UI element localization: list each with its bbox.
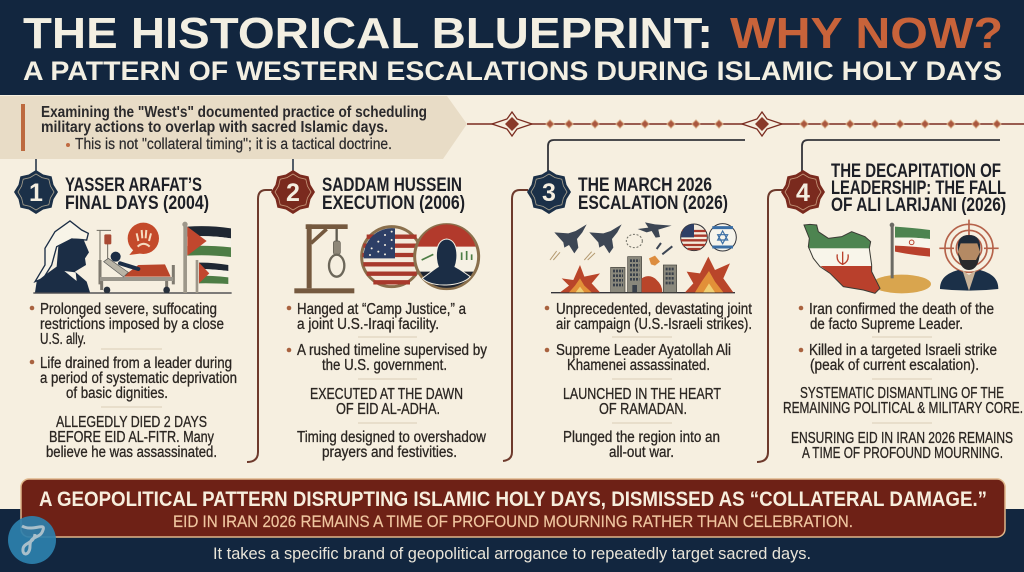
panel: intro arrow banner: This is not "collateral timing"; it is a tactical doctrine. (75, 136, 392, 153)
badge 4: 4 (796, 179, 810, 207)
text block 2: a joint U.S.-Iraqi facility. (297, 316, 439, 333)
icon: leader, hospital bed and flags (33, 221, 232, 293)
panel: column 4 Larijani (781, 160, 1023, 462)
text block 2: A rushed timeline supervised by (297, 342, 487, 359)
heading 3: ESCALATION (2026) (578, 192, 728, 214)
text block 3: Khamenei assassinated. (567, 357, 710, 374)
text block 2 (287, 301, 487, 461)
icon: watermark logo (8, 516, 56, 564)
text block 2: the U.S. government. (322, 357, 447, 374)
callout: conclusion banner (21, 479, 1005, 537)
icon: jets, city and explosions (550, 222, 736, 293)
text block 4 (783, 301, 1023, 462)
text block 1: ALLEGEDLY DIED 2 DAYS (56, 414, 207, 431)
text block 3: Supreme Leader Ayatollah Ali (556, 342, 731, 359)
heading 1: YASSER ARAFAT’S (65, 174, 202, 196)
text block 1 (30, 301, 237, 461)
panel: intro arrow banner (0, 96, 467, 159)
heading 2: EXECUTION (2006) (322, 192, 465, 214)
text block 1: Life drained from a leader during (40, 355, 232, 372)
text block 2: EXECUTED AT THE DAWN (310, 386, 463, 403)
text block 2: OF EID AL-ADHA. (336, 401, 440, 418)
text block 4: (peak of current escalation). (810, 357, 979, 374)
badge 3 (527, 170, 571, 214)
panel: column 3 March 2026 (527, 170, 753, 461)
subtitle: A PATTERN OF WESTERN ESCALATIONS DURING ISLAMIC HOLY DAYS (23, 56, 1002, 86)
heading 1: FINAL DAYS (2004) (65, 192, 209, 214)
icon: gallows and flag medallions (294, 224, 479, 293)
title accent: WHY NOW? (730, 9, 1003, 58)
closing line: It takes a specific brand of geopolitical arrogance to repeatedly target sacred days. (213, 544, 811, 563)
text block 3: all-out war. (609, 444, 674, 461)
heading 1 (65, 174, 209, 214)
text block 2: Timing designed to overshadow (297, 429, 487, 446)
text block 1: of basic dignities. (66, 385, 168, 402)
badge 3: 3 (542, 179, 556, 207)
badge 2: 2 (286, 179, 300, 207)
header: title band (0, 0, 1024, 95)
heading 4 (831, 160, 1006, 216)
text block 2: prayers and festivities. (322, 444, 457, 461)
text block 3 (545, 301, 753, 461)
badge 1 (14, 170, 58, 214)
text block 1: BEFORE EID AL-FITR. Many (49, 429, 214, 446)
text block 4: de facto Supreme Leader. (810, 316, 963, 333)
text block 4: Iran confirmed the death of the (809, 301, 994, 318)
heading 3: THE MARCH 2026 (578, 174, 712, 196)
badge 4 (781, 170, 825, 214)
text block 1: a period of systematic deprivation (40, 370, 237, 387)
panel: intro arrow banner: Examining the "West's" documented practice of scheduling (41, 104, 427, 121)
text block 3: Plunged the region into an (563, 429, 720, 446)
connector lines (36, 140, 1000, 462)
heading 2: SADDAM HUSSEIN (322, 174, 462, 196)
panel: intro arrow banner: military actions to overlap with sacred Islamic days. (41, 119, 388, 136)
text block 3: Unprecedented, devastating joint (556, 301, 753, 318)
panel: column 2 Saddam (271, 170, 487, 461)
callout: conclusion banner: EID IN IRAN 2026 REMAINS A TIME OF PROFOUND MOURNING RATHER THAN CELEBRATION. (173, 512, 853, 531)
badge 1: 1 (29, 179, 43, 207)
text block 2: Hanged at “Camp Justice,” a (297, 301, 466, 318)
text block 3: OF RAMADAN. (599, 401, 687, 418)
text block 1: Prolonged severe, suffocating (40, 301, 217, 318)
text block 1: believe he was assassinated. (46, 444, 217, 461)
badge 2 (271, 170, 315, 214)
text block 1: U.S. ally. (40, 331, 86, 348)
text block 3: LAUNCHED IN THE HEART (563, 386, 721, 403)
text block 1: restrictions imposed by a close (40, 316, 224, 333)
icon: Iran map, flag and target (804, 220, 999, 293)
panel: column 1 Arafat (14, 170, 237, 461)
text block 3: air campaign (U.S.-Israeli strikes). (556, 316, 752, 333)
heading 2 (322, 174, 465, 214)
text block 4: Killed in a targeted Israeli strike (809, 342, 997, 359)
heading 3 (578, 174, 728, 214)
ornamental timeline (467, 112, 1024, 136)
footer band (0, 509, 1024, 572)
title: THE HISTORICAL BLUEPRINT: (23, 9, 713, 58)
